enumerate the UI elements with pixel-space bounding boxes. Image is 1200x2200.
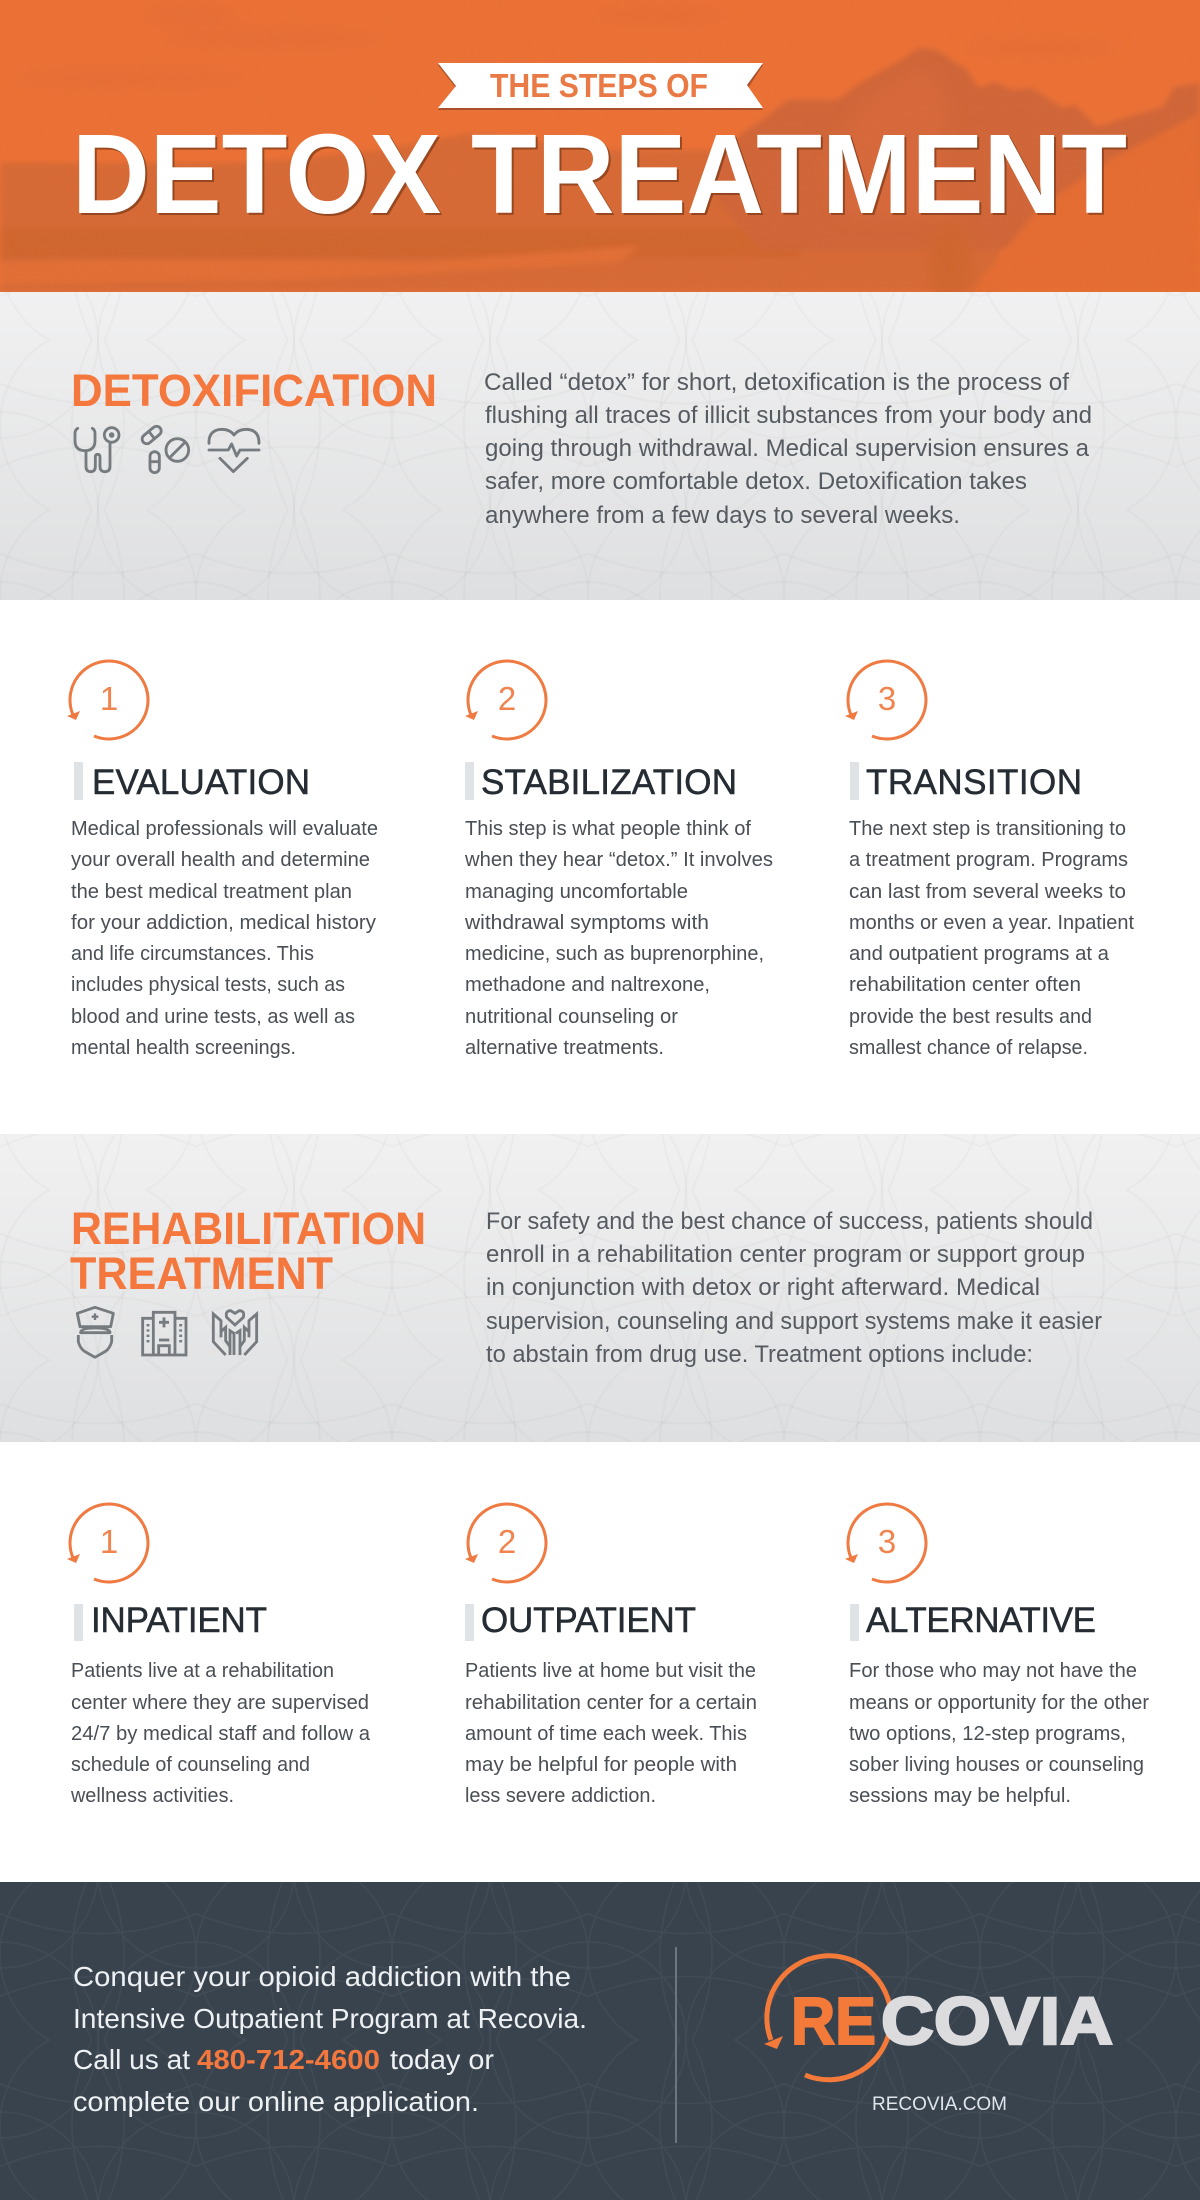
foreground slope: [971, 113, 1200, 292]
icon: option 2 circle arrow: [465, 1504, 546, 1582]
text block: alternative: means or opportunity for the other: [849, 1692, 1149, 1714]
text block: inpatient: Patients live at a rehabilitation: [71, 1660, 334, 1682]
heading: inpatient: INPATIENT: [91, 1601, 267, 1640]
text block: inpatient: wellness activities.: [70, 1785, 234, 1807]
text block: alternative: [849, 1660, 1149, 1807]
text block: stabilization: withdrawal symptoms with: [464, 912, 709, 934]
text block: transition: a treatment program. Programs: [849, 849, 1128, 871]
text block: detoxification intro: [484, 369, 1092, 529]
text block: stabilization: medicine, such as buprenorphine,: [465, 943, 764, 965]
icon: option 1 circle arrow: [67, 1504, 148, 1582]
text block: stabilization: nutritional counseling or: [465, 1006, 678, 1028]
text block: alternative: For those who may not have the: [849, 1660, 1137, 1682]
banner: [438, 63, 763, 110]
icon: option 3 circle arrow: 3: [878, 1523, 896, 1560]
step: evaluation: [67, 661, 378, 1059]
header panel: [0, 0, 1200, 302]
icon: step 2 circle arrow: [465, 661, 546, 739]
mountain: [700, 48, 1200, 250]
text block: stabilization: alternative treatments.: [465, 1037, 664, 1059]
panel: detoxification: [0, 292, 1200, 600]
call to action text: Call us at: [73, 2044, 190, 2075]
icon: step 2 circle arrow: 2: [498, 680, 516, 717]
icon: option 3 circle arrow: [845, 1504, 926, 1582]
text block: alternative: sober living houses or counseling: [849, 1754, 1144, 1776]
logo url: RECOVIA.COM: [872, 2094, 1007, 2115]
text block: detoxification intro: going through withdrawal. Medical supervision ensures a: [485, 435, 1090, 462]
text block: inpatient: schedule of counseling and: [71, 1754, 310, 1776]
text block: detoxification intro: flushing all traces of illicit substances from your body and: [485, 402, 1092, 429]
text block: transition: The next step is transitioning to: [849, 818, 1126, 840]
icon: pills: [140, 424, 189, 473]
text block: inpatient: center where they are supervised: [71, 1692, 369, 1714]
icon: step 3 circle arrow: 3: [878, 680, 896, 717]
icon: hands holding heart: [213, 1311, 257, 1355]
text block: evaluation: the best medical treatment plan: [71, 881, 352, 903]
heading: stabilization: STABILIZATION: [481, 763, 737, 802]
call to action text: [73, 1961, 587, 2117]
text block: evaluation: includes physical tests, such as: [71, 974, 345, 996]
text block: transition: rehabilitation center often: [849, 974, 1081, 996]
step: transition: [845, 661, 1134, 1059]
heading: detoxification: DETOXIFICATION: [71, 365, 437, 416]
text block: inpatient: [70, 1660, 371, 1807]
main title: DETOX TREATMENT: [72, 111, 1127, 237]
text block: evaluation: your overall health and determine: [71, 849, 370, 871]
text block: outpatient: less severe addiction.: [465, 1785, 656, 1807]
heading: rehabilitation treatment: TREATMENT: [70, 1248, 333, 1299]
icon: step 1 circle arrow: 1: [100, 680, 118, 717]
text block: outpatient: may be helpful for people with: [465, 1754, 737, 1776]
panel: rehabilitation treatment: [0, 1134, 1200, 1442]
text block: stabilization: methadone and naltrexone,: [465, 974, 710, 996]
logo: recovia: [764, 1956, 1113, 2115]
heading: outpatient: OUTPATIENT: [481, 1601, 696, 1640]
text block: outpatient: Patients live at home but visit the: [465, 1660, 756, 1682]
text block: transition: provide the best results and: [849, 1006, 1092, 1028]
option: alternative: [845, 1504, 1149, 1807]
text block: alternative: sessions may be helpful.: [849, 1785, 1071, 1807]
text block: transition: months or even a year. Inpatient: [849, 912, 1134, 934]
call to action text: complete our online application.: [73, 2086, 479, 2117]
text block: detoxification intro: Called “detox” for short, detoxification is the process of: [484, 369, 1069, 396]
icon: hospital: [143, 1312, 186, 1355]
text block: rehabilitation intro: enroll in a rehabilitation center program or support group: [486, 1241, 1085, 1268]
icon: option 1 circle arrow: 1: [100, 1523, 118, 1560]
option: outpatient: [465, 1504, 757, 1807]
text block: rehabilitation intro: to abstain from drug use. Treatment options include:: [486, 1341, 1033, 1368]
text block: evaluation: Medical professionals will evaluate: [71, 818, 378, 840]
text block: evaluation: blood and urine tests, as well as: [71, 1006, 355, 1028]
text block: rehabilitation intro: For safety and the best chance of success, patients should: [486, 1208, 1093, 1235]
heading: alternative: ALTERNATIVE: [866, 1601, 1096, 1640]
heading: rehabilitation treatment: REHABILITATION: [71, 1203, 426, 1254]
text block: rehabilitation intro: [486, 1208, 1102, 1368]
text block: evaluation: mental health screenings.: [71, 1037, 296, 1059]
text block: transition: smallest chance of relapse.: [849, 1037, 1088, 1059]
call to action text: Intensive Outpatient Program at Recovia.: [73, 2003, 587, 2034]
text block: transition: and outpatient programs at a: [849, 943, 1110, 965]
call to action text: 480-712-4600: [197, 2044, 380, 2075]
heading: transition: TRANSITION: [866, 763, 1082, 802]
icon: nurse: [77, 1307, 113, 1357]
icon: step 1 circle arrow: [67, 661, 148, 739]
icon: step 3 circle arrow: [845, 661, 926, 739]
icon: stethoscope: [75, 428, 119, 472]
text block: stabilization: managing uncomfortable: [465, 881, 688, 903]
text block: evaluation: [71, 818, 378, 1059]
text block: evaluation: and life circumstances. This: [71, 943, 314, 965]
call to action text: today or: [390, 2044, 494, 2075]
logo: recovia: COVIA: [881, 1984, 1113, 2059]
text block: transition: [849, 818, 1134, 1059]
text block: stabilization: when they hear “detox.” It involves: [464, 849, 773, 871]
text block: rehabilitation intro: supervision, counseling and support systems make it easier: [486, 1308, 1102, 1335]
heading: evaluation: EVALUATION: [92, 763, 310, 802]
text block: rehabilitation intro: in conjunction with detox or right afterward. Medical: [486, 1274, 1040, 1301]
icon: option 2 circle arrow: 2: [498, 1523, 516, 1560]
panel: footer: [0, 1882, 1200, 2200]
text block: transition: can last from several weeks to: [849, 881, 1126, 903]
text block: detoxification intro: safer, more comfortable detox. Detoxification takes: [485, 468, 1027, 495]
step: stabilization: [464, 661, 773, 1059]
text block: outpatient: rehabilitation center for a certain: [465, 1692, 757, 1714]
text block: outpatient: amount of time each week. This: [465, 1723, 747, 1745]
text block: alternative: two options, 12-step programs,: [849, 1723, 1126, 1745]
text block: outpatient: [465, 1660, 757, 1807]
distant hills and ground: [0, 133, 1000, 292]
text block: evaluation: for your addiction, medical history: [71, 912, 376, 934]
text block: stabilization: [464, 818, 773, 1059]
call to action text: Conquer your opioid addiction with the: [73, 1961, 571, 1992]
banner text: THE STEPS OF: [490, 67, 708, 104]
text block: detoxification intro: anywhere from a few days to several weeks.: [485, 502, 960, 529]
logo: recovia: RE: [791, 1984, 876, 2059]
option: inpatient: [67, 1504, 371, 1807]
icon: heart with pulse: [209, 429, 259, 472]
text block: stabilization: This step is what people think of: [465, 818, 751, 840]
heading: rehabilitation treatment: [70, 1203, 426, 1299]
text block: inpatient: 24/7 by medical staff and follow a: [71, 1723, 371, 1745]
